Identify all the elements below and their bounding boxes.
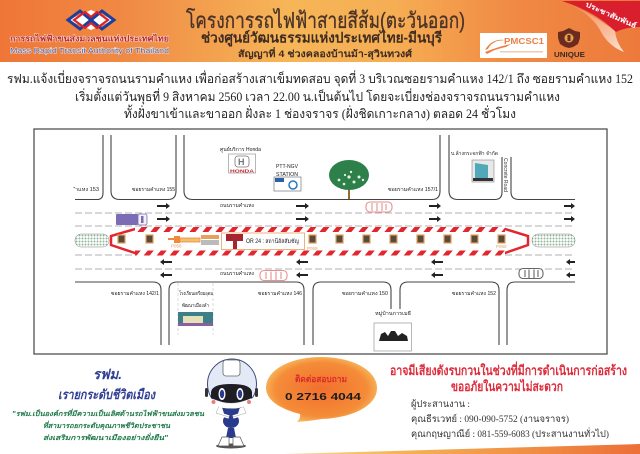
apology notice — [390, 361, 627, 394]
bubble heading: ติดต่อสอบถาม — [295, 374, 347, 384]
slogan quote: "รฟม.เป็นองค์กรที่มีความเป็นเลิศด้านรถไฟฟ้าขนส่งมวลชน — [12, 408, 205, 418]
road labels — [73, 187, 496, 297]
icon: PMCSC1 logo — [480, 33, 547, 58]
road labels: ซอยรามคำแหง 152 — [452, 291, 496, 297]
announcement text — [7, 70, 633, 121]
MRTA name English: Mass Rapid Transit Authority of Thailand — [10, 46, 169, 55]
header banner — [0, 0, 640, 62]
landmark: company building: บ.ล้างกระจกฟ้า จำกัด — [451, 150, 498, 157]
slogan quote — [12, 408, 205, 442]
road labels: ซอยรามคำแหง 157/1 — [388, 187, 438, 193]
MRTA name Thai: การรถไฟฟ้าขนส่งมวลชนแห่งประเทศไทย — [10, 34, 169, 44]
slogan heading: รฟม. — [93, 366, 122, 382]
icon: tree — [329, 160, 369, 199]
slogan quote: ที่สามารถยกระดับคุณภาพชีวิตประชาชน — [43, 420, 171, 430]
contact 2: คุณกฤษญาณีย์ : 081-559-6083 (ประสานงานทั่วไป) — [411, 427, 609, 440]
mascot face — [211, 384, 252, 403]
work area callout — [222, 233, 304, 250]
subtitle: ช่วงศูนย์วัฒนธรรมแห่งประเทศไทย-มีนบุรี — [201, 28, 442, 46]
contact 1: คุณธีรเวทย์ : 090-090-5752 (งานจราจร) — [411, 413, 569, 425]
road labels: ำแหง 153 — [73, 187, 99, 193]
icon: excavator — [226, 234, 243, 249]
road labels: ถนนรามคำแหง — [220, 203, 255, 209]
landmark: school: โรงเรียนเตรียมอุดม — [179, 290, 213, 297]
traffic diagram panel — [34, 129, 607, 354]
landmark: school — [178, 283, 213, 335]
contact bubble — [266, 357, 377, 422]
announcement line 3: ทั้งฝั่งขาเข้าและขาออก ฝั่งละ 1 ช่องจราจร (ฝั่งชิดเกาะกลาง) ตลอด 24 ชั่วโมง — [124, 104, 516, 121]
icon: PMCSC1 logo: PMCSC1 — [504, 37, 545, 46]
road labels: ซอยรามคำแหง 146 — [258, 291, 302, 297]
vehicle: grey car — [519, 268, 543, 278]
contact heading: ผู้ประสานงาน : — [411, 399, 470, 410]
callout label: OR 24 : สถานีอัสสัมชัญ — [246, 237, 299, 245]
road kerbs and side streets — [75, 135, 575, 345]
icon: corner ribbon — [562, 0, 640, 52]
direction arrows — [157, 203, 575, 278]
landmark: Honda service centre: H — [238, 157, 244, 167]
lane markings — [75, 213, 575, 269]
piles — [118, 235, 505, 243]
slogan block — [12, 366, 205, 442]
medians — [75, 234, 575, 247]
icon: UNIQUE logo — [554, 28, 585, 59]
landmark: PTT NGV station: PTT-NGV — [276, 164, 299, 170]
slogan quote: ส่งเสริมการพัฒนาเมืองอย่างยั่งยืน" — [43, 432, 169, 442]
vehicle: purple truck — [116, 214, 147, 225]
work in progress machinery — [168, 235, 507, 251]
vehicle: pink car top — [366, 202, 392, 212]
landmark: PTT NGV station — [274, 164, 301, 191]
ribbon label: ประชาสัมพันธ์ — [584, 0, 638, 30]
road labels: ถนนรามคำแหง — [220, 271, 255, 277]
announcement line 2: เริ่มตั้งแต่วันพุธที่ 9 สิงหาคม 2560 เวลา 22.00 น.เป็นต้นไป โดยจะเบี่ยงช่องจราจรถนนรามคำแหง — [75, 87, 560, 105]
work in progress machinery: P059 — [307, 246, 318, 251]
road labels: ซอยรามคำแหง 142/1 — [111, 291, 159, 297]
mascot body — [226, 428, 236, 438]
title: โครงการรถไฟฟ้าสายสีส้ม(ตะวันออก) — [186, 8, 465, 33]
work in progress machinery: P060 — [496, 244, 507, 249]
Concrete Road label: Concrete Road — [502, 158, 508, 192]
construction zone — [111, 227, 528, 256]
slogan subheading: เรายกระดับชีวิตเมือง — [58, 387, 156, 402]
icon: UNIQUE logo: UNIQUE — [554, 50, 585, 59]
apology line 2: ขออภัยในความไม่สะดวก — [451, 378, 563, 394]
landmark: Honda service centre: ศูนย์บริการ Honda — [220, 146, 261, 153]
landmark: housing village: หมู่บ้านการเมธี — [375, 310, 411, 317]
work in progress machinery: P058 — [171, 244, 182, 248]
landmark: school: พัฒนาเมืองลำ — [182, 302, 209, 309]
contract line: สัญญาที่ 4 ช่วงคลองบ้านม้า-สุวินทวงศ์ — [238, 46, 413, 60]
landmark: Honda service centre — [220, 146, 261, 174]
landmark: company building — [451, 150, 498, 182]
icon: MRTA logo — [68, 10, 114, 30]
road labels: ซอยรามคำแหง 155 — [132, 187, 175, 193]
vehicles — [116, 202, 543, 280]
landmark: Honda service centre: HONDA — [230, 168, 255, 174]
road labels: ซอยรามคำแหง 150 — [342, 291, 388, 297]
vehicle: pink car bottom — [260, 270, 287, 280]
landmark: PTT NGV station: STATION — [276, 172, 298, 178]
mascot helmet — [208, 359, 256, 409]
coordinator contacts — [411, 399, 609, 440]
landmark: housing village — [374, 310, 412, 351]
footer wedge — [285, 444, 640, 454]
icon: mascot — [205, 359, 258, 448]
bubble phone number: 0 2716 4044 — [285, 392, 362, 403]
